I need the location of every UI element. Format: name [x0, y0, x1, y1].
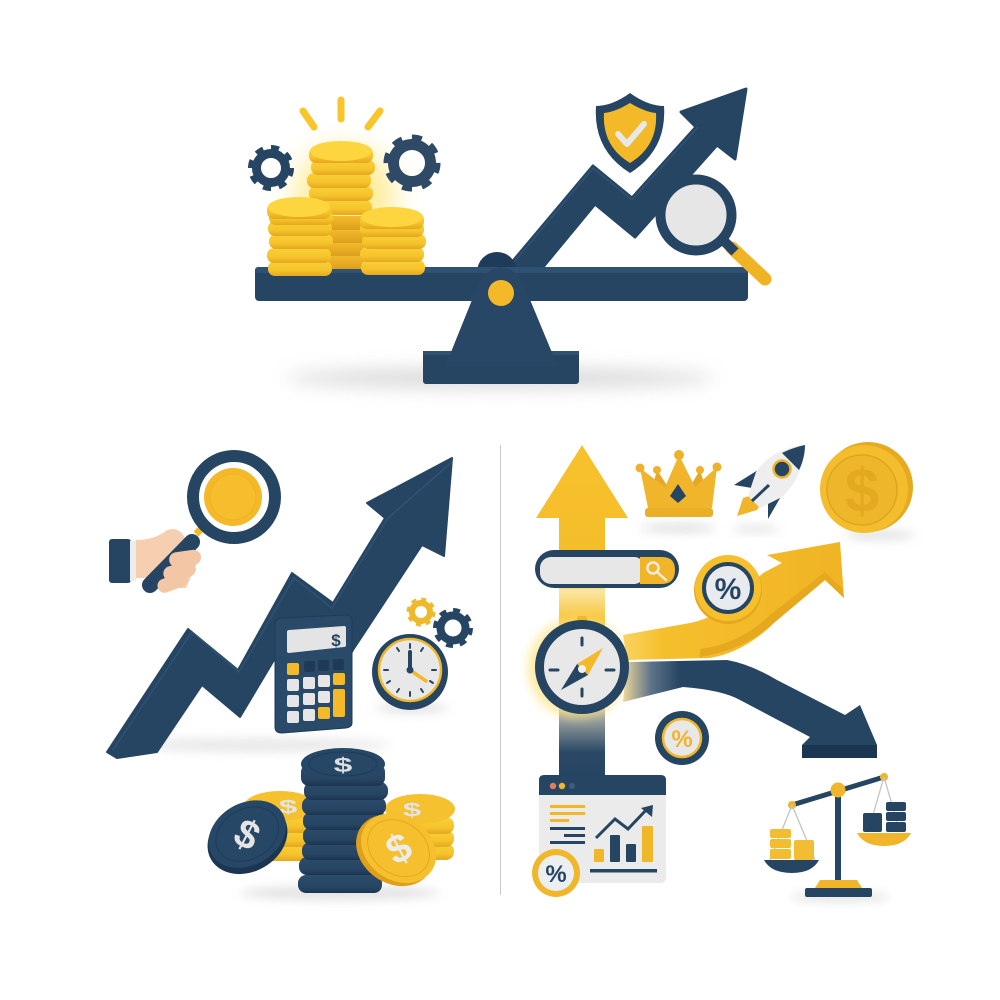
- left weights: [770, 829, 814, 860]
- icon: pivot bump: [477, 252, 517, 292]
- tilted yellow coin: [342, 797, 450, 901]
- icon: percent badge on arrow: [694, 555, 762, 624]
- icon: browser chart window: [539, 775, 666, 883]
- icon: yellow gear: [409, 600, 433, 624]
- icon: left gear: [252, 149, 290, 187]
- seesaw beam: [255, 267, 748, 301]
- icon: up arrow: [536, 445, 628, 775]
- icon: gold dollar coin: [820, 442, 915, 540]
- right yellow stack: $: [403, 799, 421, 820]
- left yellow stack: [243, 791, 316, 861]
- text lines: [550, 805, 585, 844]
- icon: search bar: [535, 550, 679, 588]
- icon: rising arrow: [508, 89, 746, 273]
- ground shadow: [285, 368, 715, 388]
- icon: rocket: [732, 445, 805, 532]
- icon: crown: [636, 450, 722, 532]
- icon: gold dollar coin: $: [845, 457, 879, 526]
- icon: hand with magnifier: [109, 456, 275, 595]
- tilted navy coin: [194, 787, 301, 888]
- left yellow stack: $: [279, 796, 297, 817]
- calculator screen: $: [331, 631, 341, 650]
- icon: clock: [372, 634, 448, 713]
- right weights: [863, 802, 906, 832]
- icon: navy gear: [436, 612, 470, 644]
- icon: sparkle rays: [303, 100, 380, 127]
- lens: [193, 456, 275, 538]
- mini arrow: [596, 805, 653, 838]
- icon: compass: [540, 616, 624, 710]
- lens yellow neck: [196, 522, 208, 534]
- icon: navy falling arrow: [623, 660, 877, 758]
- icon: glow behind compass: [528, 618, 628, 718]
- icon: right coin stack: [360, 207, 426, 275]
- icon: coin glow: [295, 147, 395, 243]
- icon: calculator: [275, 615, 352, 733]
- icon: left coin stack: [267, 197, 333, 276]
- calculator keys: [287, 659, 345, 723]
- window dots: [550, 783, 575, 789]
- palm: [136, 529, 200, 588]
- sleeve: [109, 539, 131, 583]
- icon: small percent badge: %: [671, 726, 693, 753]
- tilted yellow coin: $: [379, 824, 419, 874]
- arrow shadow: [130, 738, 390, 752]
- handle: [150, 542, 192, 585]
- panel: left growth: [107, 456, 470, 901]
- icon: yellow rising arrow: [623, 542, 844, 660]
- icon: zigzag rising arrow: [107, 458, 452, 758]
- icon: small percent badge: [655, 711, 709, 765]
- icon: magnifier: [660, 180, 765, 279]
- icon: window percent badge: [532, 849, 580, 897]
- tilted navy coin: $: [227, 810, 267, 860]
- icon: window percent badge: %: [545, 861, 567, 888]
- navy stack: $: [334, 754, 353, 776]
- mini bars: [590, 826, 657, 872]
- right yellow stack: [385, 794, 455, 860]
- icon: shield with check: [596, 93, 664, 173]
- fulcrum: [423, 267, 579, 384]
- icon: balance scale: [764, 773, 911, 901]
- panel: top seesaw balance: [252, 89, 765, 388]
- icon: percent badge on arrow: %: [715, 573, 741, 606]
- icon: coin pile: [194, 748, 455, 901]
- icon: centre coin stack: [307, 141, 375, 269]
- divider: [500, 445, 501, 895]
- icon: right gear: [388, 139, 436, 187]
- navy stack: [298, 748, 388, 893]
- panel: right strategy: [528, 442, 915, 901]
- fingers: [156, 549, 202, 595]
